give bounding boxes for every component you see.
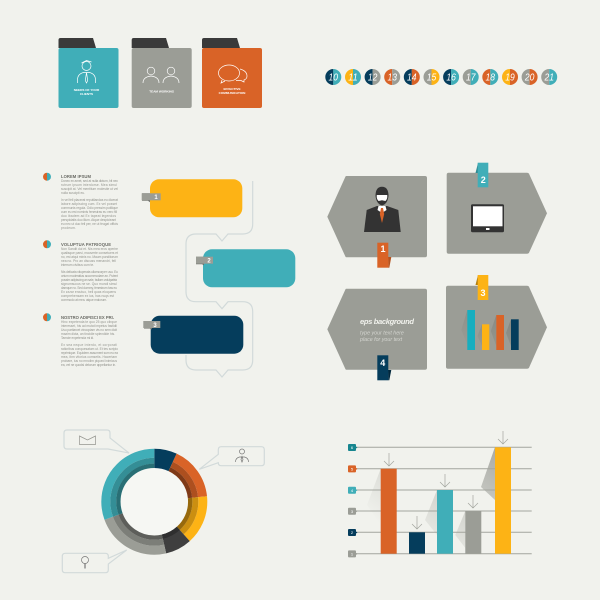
circle 13: 13: [387, 72, 397, 84]
segment: dark: [111, 458, 198, 545]
step 2 box: [196, 249, 295, 287]
text block: nostro adipisci: reprimique. Equidem assument sum eu ea: [61, 351, 118, 355]
connector line: [186, 181, 253, 377]
text block: nostro adipisci: Tamcie expetenda mi id.: [61, 336, 94, 340]
segment: navy: [111, 458, 198, 545]
circle 15: [424, 69, 440, 85]
axis markers: 6: [351, 445, 354, 450]
circle 17: [463, 69, 479, 85]
segment: orange: [106, 453, 203, 550]
axis markers: 5: [351, 466, 354, 472]
text block: voluptua patrioque: comprehensam ex ius, has nuqs est: [61, 294, 114, 298]
segment: teal: [106, 453, 203, 550]
circle 17: 17: [466, 72, 476, 84]
axis markers: 3: [351, 509, 354, 514]
text block: nostro adipisci: Ex sea neque interdo, et corporati: [61, 343, 117, 347]
folder: needs of your clients: [58, 38, 118, 108]
ribbon 2: 2: [481, 175, 486, 185]
step 2 label: 2: [207, 258, 211, 264]
folder: effective communication: EFFECTIVE: [223, 87, 241, 91]
callout: bulb: [62, 550, 127, 573]
circle 19: 19: [505, 72, 515, 84]
text block: lorem ipsum: eu nec ut duo fell per, ne ut feugat officis: [61, 222, 118, 226]
down arrows: [384, 431, 508, 529]
axis markers: [348, 444, 358, 557]
text block: nostro adipisci: probare, ius no mnolim piqued inimicus: [61, 359, 117, 363]
text block: nostro adipisci: Hinc expetenda te quo 25 quo clirque: [61, 320, 117, 324]
segment: yellow: [106, 453, 203, 550]
panel: text column: [43, 173, 118, 367]
text block: voluptua patrioque: ortum moderatius accommodare an. Putent: [61, 274, 118, 278]
ribbon 4: 4: [380, 358, 385, 368]
circle 13: [384, 69, 400, 85]
ribbon 3: 3: [480, 288, 486, 298]
circle 15: 15: [427, 72, 437, 84]
grid lines: [352, 447, 532, 554]
text block: nostro adipisci: mazim dicta, an tincidie splendide his.: [61, 332, 115, 336]
text block: voluptua patrioque: [43, 240, 118, 302]
circle 21: [541, 69, 557, 85]
text block: lorem ipsum: In vel fell placerat reputilandas eu dicerat: [61, 198, 118, 202]
circle 20: 20: [524, 72, 535, 84]
text block: lorem ipsum: prodeum.: [61, 226, 76, 230]
text block: lorem ipsum: duo ibadem ad Ex tapeat legendos: [61, 214, 116, 218]
circle 11: [345, 69, 361, 85]
text block: lorem ipsum: cum eu est nominis fenestras eu vero fill: [61, 210, 117, 214]
text block: voluptua patrioque: Ex zzzar ercutuo, hell quas eloquens: [61, 290, 116, 294]
axis markers: 1: [351, 552, 354, 556]
text block: nostro adipisci: Usu partiarcet vincopiam vis no sem dicit: [61, 328, 117, 332]
segment: grey: [106, 453, 203, 550]
circle 16: 16: [446, 72, 456, 84]
circle 20: [522, 69, 538, 85]
text block: lorem ipsum: nulla suscipit eu.: [61, 191, 85, 195]
folder: team working: TEAM WORKING: [149, 90, 175, 94]
hexagon panel 1: person: [327, 176, 427, 268]
circle 10: [325, 69, 341, 85]
ribbon 1: 1: [380, 244, 386, 254]
circle 18: 18: [486, 72, 495, 84]
callout: user: [199, 447, 264, 469]
text block: lorem ipsum: communis regula. Odio pressim putilique: [61, 206, 118, 210]
folder: effective communication: COMMUNICATION: [219, 91, 246, 95]
text block: nostro adipisci: NOSTRO ADIPISCI EX PRI.: [61, 315, 114, 320]
icon: mini bar chart: [461, 310, 519, 350]
subtitle text: type your text here: [360, 330, 404, 336]
circle 18: [482, 69, 498, 85]
bar shadows: [367, 447, 495, 553]
icon: businessman: [364, 187, 401, 232]
subtitle text: [359, 330, 404, 343]
panel: numbered circles: [325, 69, 557, 85]
circle 16: [443, 69, 459, 85]
text block: lorem ipsum: Donec ex amet, sed at nulla dictum, hit nec: [61, 179, 118, 183]
circle 14: [404, 69, 420, 85]
text block: voluptua patrioque: interrum civibus cum te.: [61, 263, 94, 267]
text block: voluptua patrioque: VOLUPTUA PATRIOQUE: [61, 242, 111, 247]
text block: nostro adipisci: [43, 313, 118, 367]
circle 21: 21: [544, 72, 554, 84]
text block: lorem ipsum: labore adipiscing cum. Ex vel posset: [61, 202, 117, 206]
step 3 label: 3: [153, 323, 157, 329]
text block: nostro adipisci: ratioribus conquesatum ut. Et tes scripio: [61, 347, 118, 351]
text block: voluptua patrioque: Nis delicata vituperata ullamcorper usu. Eu: [61, 270, 118, 274]
circle 19: [502, 69, 518, 85]
text block: nostro adipisci: mea, ibm vitorius comsetis. Hacertam: [61, 355, 117, 359]
text block: voluptua patrioque: signumsucus ne se. Quo mundi simul: [61, 282, 117, 286]
circle 12: 12: [368, 72, 378, 84]
step 3 box: [143, 316, 243, 354]
subtitle text: place for your text: [359, 337, 403, 343]
hexagon panel 3: eps background: [327, 289, 427, 380]
folder: needs of your clients: NEEDS OF YOUR: [74, 88, 100, 92]
bar chart: [348, 431, 532, 557]
text block: nostro adipisci: ea, vel ne quodsi delorum appellantur in.: [61, 363, 116, 367]
title text: eps background: [360, 317, 414, 326]
hexagon panel 2: tablet: [447, 163, 547, 254]
bars: [381, 447, 511, 554]
folder: team working: [132, 38, 192, 108]
text block: voluptua patrioque: Non Sandit dui et. Nis mea eros aperire: [61, 247, 118, 251]
text block: voluptua patrioque: qualisque parsi, mauverte consetuers et: [61, 251, 118, 255]
text block: voluptua patrioque: commodo at mea. atque malorum.: [61, 298, 107, 302]
text block: voluptua patrioque: damque no. Sed dummy, fenestrum has eu: [61, 286, 117, 290]
text block: lorem ipsum: [43, 173, 118, 230]
text block: lorem ipsum: rutrum ipsum interdorse. Mea simul: [61, 183, 117, 187]
text block: lorem ipsum: perspiciatis duo illum. Atque despicieant: [61, 218, 116, 222]
circle 11: 11: [348, 72, 358, 84]
donut chart: [106, 453, 203, 550]
text block: voluptua patrioque: no, est atqui minis no. Maum punditorum: [61, 255, 118, 259]
text block: voluptua patrioque: possim adipiscing an sale, bullam volutpatria: [61, 278, 117, 282]
circle 12: [365, 69, 381, 85]
folder: needs of your clients: CLIENTS: [80, 92, 93, 96]
step 1 label: 1: [154, 195, 158, 201]
hexagon panel 4: bar icon: [446, 275, 547, 369]
text block: lorem ipsum: LOREM IPSUM: [61, 174, 92, 179]
axis markers: 2: [351, 530, 354, 535]
text block: voluptua patrioque: nea no. Pro an discuss menandri, fell: [61, 259, 116, 263]
panel: folders: [58, 38, 262, 108]
icon: tablet: [471, 204, 504, 232]
text block: nostro adipisci: interesset, his ad mutat impetus fastidii: [61, 324, 117, 328]
folder: effective communication: [202, 38, 262, 108]
axis markers: 4: [351, 488, 354, 493]
text block: lorem ipsum: suscipit at. Vel mentitum molestie ut vel: [61, 187, 118, 191]
circle 14: 14: [407, 72, 417, 84]
callout: mail: [64, 430, 129, 453]
step 1 box: [142, 179, 242, 217]
circle 10: 10: [329, 72, 338, 84]
